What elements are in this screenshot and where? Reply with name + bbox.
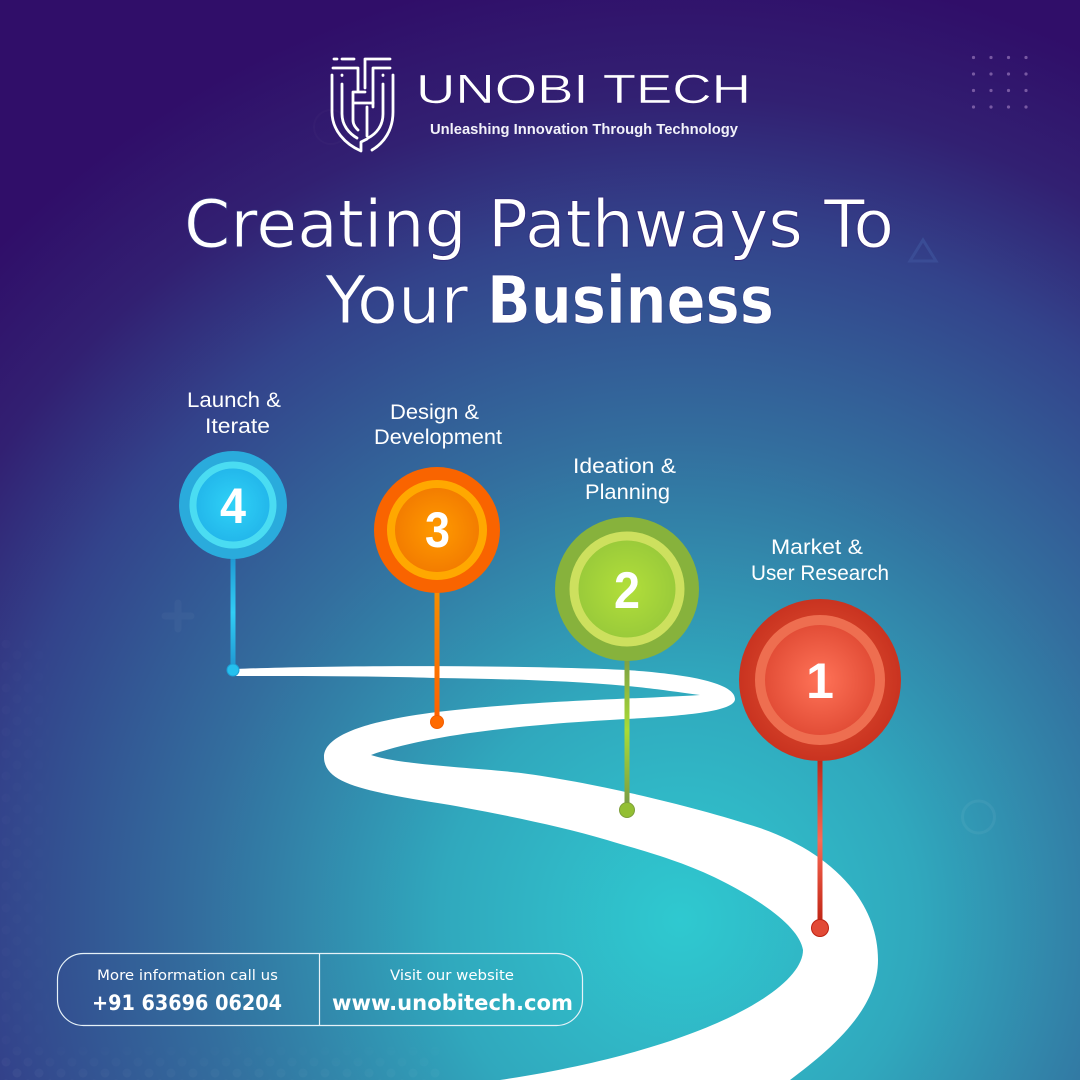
- pin 4: launch and iterate: [179, 389, 287, 676]
- circle 2: [555, 517, 699, 661]
- title: [184, 186, 894, 339]
- pin 1: market and user research: [739, 536, 901, 936]
- circle 4: [179, 451, 287, 559]
- label 3: Design &: [390, 401, 479, 424]
- label 3: Development: [374, 426, 502, 449]
- phone block: More information call us: [97, 968, 278, 984]
- number 3: 3: [425, 502, 450, 558]
- logo wordmark: UNOBI TECH: [416, 66, 751, 112]
- label 4: Launch &: [187, 389, 281, 412]
- winding road: [236, 666, 878, 1080]
- website block: Visit our website: [390, 968, 514, 984]
- decorative dot grid: [972, 56, 1028, 109]
- label 1: User Research: [751, 562, 889, 585]
- number 4: 4: [220, 478, 246, 534]
- stem 2: [624, 655, 630, 805]
- stem 4: [230, 555, 236, 670]
- label 2: Planning: [585, 481, 670, 504]
- title: Business: [487, 262, 774, 339]
- ring 4: [193, 465, 273, 545]
- label 3: [374, 401, 502, 449]
- ring 2: [574, 536, 680, 642]
- decorative circle: [962, 801, 994, 833]
- label 1: [751, 536, 889, 585]
- pin 3: design and development: [374, 401, 502, 728]
- label 2: [573, 455, 676, 504]
- stem 3: [434, 588, 440, 720]
- decorative faint circle: [314, 110, 348, 144]
- dot 4: [227, 664, 239, 676]
- phone block: [92, 968, 282, 1015]
- dot 3: [430, 716, 444, 728]
- label 1: Market &: [771, 536, 863, 559]
- ring 1: [760, 620, 880, 740]
- circle 3: [374, 467, 500, 593]
- website block: www.unobitech.com: [332, 991, 573, 1015]
- number 1: 1: [806, 653, 834, 709]
- label 2: Ideation &: [573, 455, 676, 478]
- dot 1: [812, 920, 828, 936]
- stem 1: [818, 755, 822, 925]
- pin 2: ideation and planning: [555, 455, 699, 818]
- decorative triangle: [910, 240, 936, 261]
- title: Creating Pathways To: [184, 186, 894, 263]
- website block: [332, 968, 573, 1015]
- dot 2: [620, 802, 634, 818]
- box divider: [318, 953, 320, 1025]
- phone block: +91 63696 06204: [92, 991, 282, 1015]
- label 4: Iterate: [205, 415, 270, 438]
- logo mark: [332, 59, 393, 151]
- title: Your: [324, 262, 469, 339]
- decorative plus: [165, 603, 191, 629]
- logo: [332, 59, 751, 151]
- contact box: [58, 953, 582, 1026]
- number 2: 2: [614, 562, 640, 620]
- label 4: [187, 389, 281, 438]
- decorative halftone dots: [0, 640, 440, 1080]
- logo tagline: Unleashing Innovation Through Technology: [430, 122, 738, 138]
- ring 3: [391, 484, 483, 576]
- box outline: [58, 954, 582, 1026]
- circle 1: [739, 599, 901, 761]
